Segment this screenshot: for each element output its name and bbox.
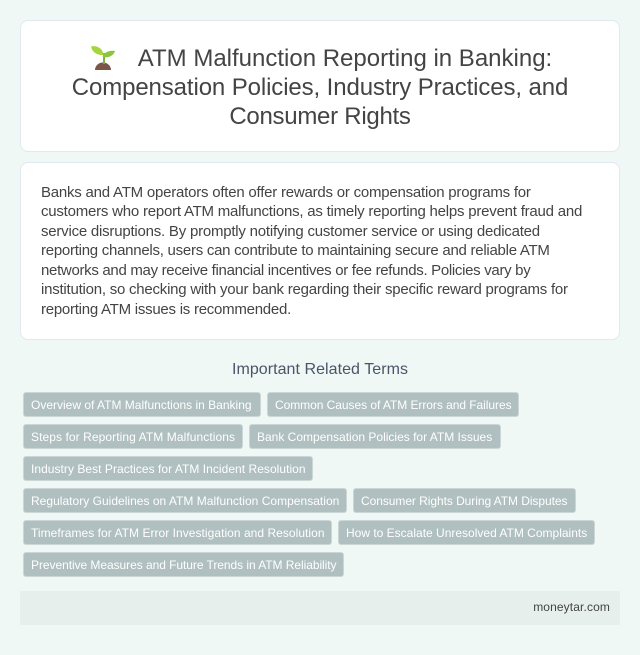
icon: seedling: [91, 46, 115, 70]
title: [72, 45, 568, 130]
tag: Consumer Rights During ATM Disputes: [361, 494, 567, 508]
description text: institution, so checking with your bank regarding their specific reward programs for: [41, 281, 568, 298]
description text: reporting ATM issues is recommended.: [41, 301, 291, 318]
title line 3: Consumer Rights: [229, 103, 411, 130]
description text: networks and may receive financial incentives or fee refunds. Policies vary by: [41, 262, 530, 279]
tag: [23, 456, 313, 481]
tag: Steps for Reporting ATM Malfunctions: [31, 430, 235, 444]
tag: Bank Compensation Policies for ATM Issues: [257, 430, 492, 444]
description text: service disruptions. By promptly notifying customer service or using dedicated: [41, 223, 540, 240]
title line 1: ATM Malfunction Reporting in Banking:: [138, 45, 552, 72]
tag: Regulatory Guidelines on ATM Malfunction Compensation: [31, 494, 339, 508]
tag: [23, 520, 332, 545]
tag: [23, 552, 344, 577]
tag: [23, 424, 243, 449]
footer bar: [20, 591, 620, 625]
description text: reporting channels, users can contribute to maintaining secure and reliable ATM: [41, 242, 550, 259]
heading: important related terms: Important Related Terms: [232, 361, 408, 378]
tag list: [23, 392, 595, 577]
footer source text: moneytar.com: [533, 600, 610, 614]
tag: Preventive Measures and Future Trends in ATM Reliability: [31, 558, 336, 572]
description text: [41, 184, 582, 318]
tag: Industry Best Practices for ATM Incident Resolution: [31, 462, 306, 476]
description text: Banks and ATM operators often offer rewards or compensation programs for: [41, 184, 531, 201]
panel: description card: [20, 162, 620, 340]
tag: Overview of ATM Malfunctions in Banking: [31, 398, 252, 412]
title line 2: Compensation Policies, Industry Practices, and: [72, 74, 568, 101]
tag: [338, 520, 595, 545]
tag: [353, 488, 576, 513]
tag: [267, 392, 519, 417]
tag: How to Escalate Unresolved ATM Complaints: [346, 526, 587, 540]
tag: Common Causes of ATM Errors and Failures: [275, 398, 512, 412]
description text: customers who report ATM malfunctions, as timely reporting helps prevent fraud and: [41, 203, 582, 220]
tag: Timeframes for ATM Error Investigation and Resolution: [31, 526, 325, 540]
tag: [23, 488, 347, 513]
tag: [23, 392, 261, 417]
panel: title card: [20, 20, 620, 152]
tag: [249, 424, 501, 449]
